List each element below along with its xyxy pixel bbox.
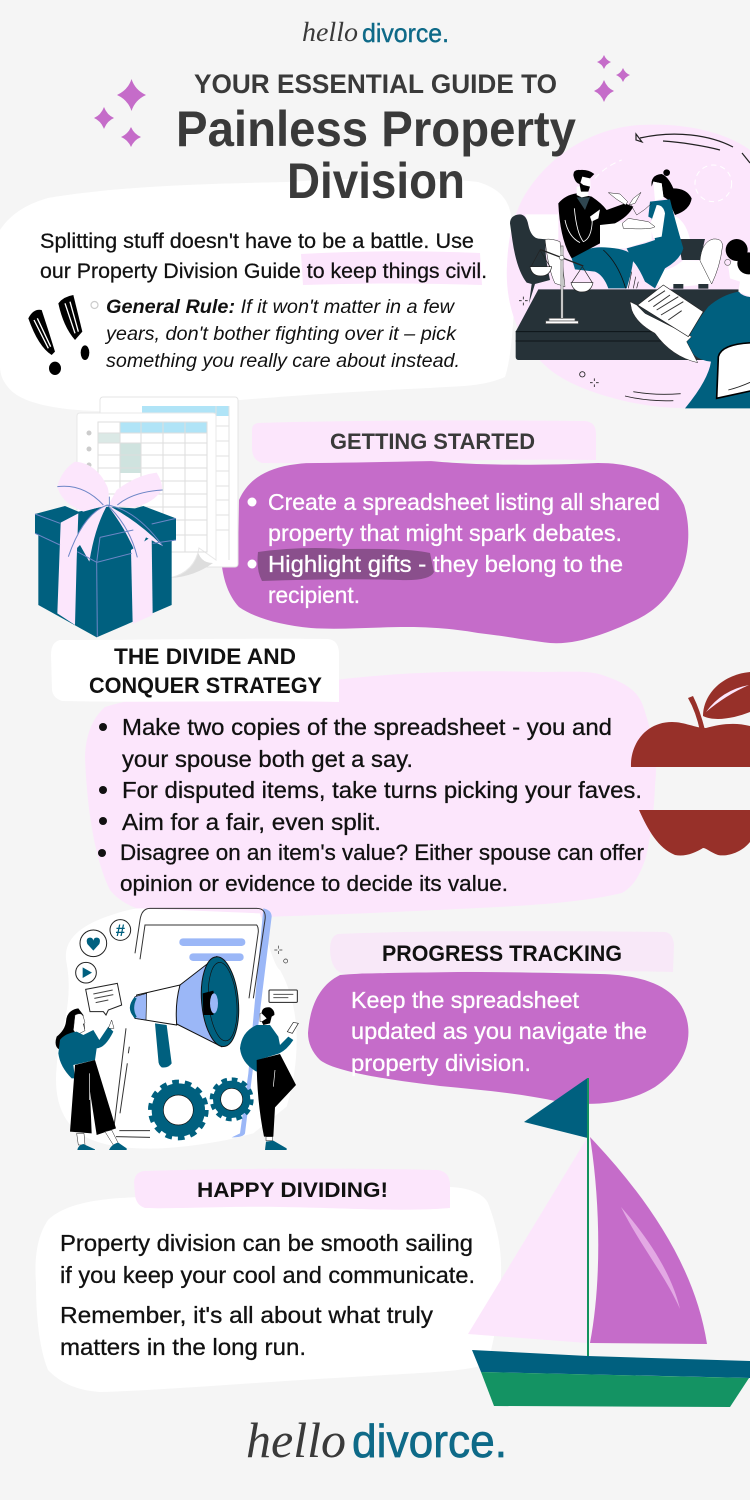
pink circle backdrop: [507, 125, 750, 408]
divide and conquer bullets: your spouse both get a say.: [122, 746, 413, 772]
getting started bullets: Highlight gifts - they belong to the: [268, 551, 623, 577]
pink sail: [468, 1138, 587, 1343]
woman: [651, 174, 692, 215]
general rule note: General Rule: If it won't matter in a few: [106, 296, 456, 318]
megaphone illustration: #: [116, 921, 125, 940]
section heading: divide and conquer: THE DIVIDE AND: [114, 644, 296, 669]
title: YOUR ESSENTIAL GUIDE TO: [194, 69, 557, 99]
bow: [57, 462, 109, 512]
leaf: [703, 672, 750, 719]
section heading: divide and conquer: CONQUER STRATEGY: [89, 673, 322, 698]
top logo: [302, 17, 449, 48]
megaphone cone: [135, 985, 180, 1025]
sparkles left: [94, 79, 146, 147]
table: [516, 289, 750, 360]
happy dividing text: if you keep your cool and communicate.: [60, 1262, 475, 1288]
phone: [232, 908, 272, 1137]
general rule note: years, don't bother fighting over it – pick: [104, 323, 457, 345]
highlight: [301, 251, 482, 285]
sofa: [525, 214, 558, 239]
divide and conquer bullets: Make two copies of the spreadsheet - you and: [122, 714, 612, 740]
hull: [472, 1350, 750, 1378]
reader with paper: [728, 257, 750, 297]
speech bubble: [86, 983, 122, 1015]
section heading: progress tracking: [330, 931, 674, 974]
divide and conquer bullets: opinion or evidence to decide its value.: [120, 871, 508, 896]
divide and conquer bullets: For disputed items, take turns picking your faves.: [122, 777, 642, 803]
getting started bullets: [248, 489, 660, 608]
bottom half: [639, 810, 750, 856]
ui bars: [179, 938, 245, 946]
progress tracking text: updated as you navigate the: [351, 1018, 647, 1044]
spreadsheet illustration: [77, 397, 238, 578]
getting started bullets: property that might spark debates.: [268, 520, 622, 546]
flag: [524, 1078, 588, 1138]
getting started bullets: recipient.: [268, 582, 360, 608]
section heading: divide and conquer: [51, 639, 339, 702]
stem: [688, 696, 705, 731]
top logo: divorce.: [362, 18, 449, 48]
curled shadow: [172, 547, 213, 578]
sparkles right: [594, 55, 630, 102]
happy dividing text: matters in the long run.: [60, 1334, 306, 1360]
mast: [587, 1078, 589, 1358]
icon: gift box: [35, 462, 176, 637]
progress tracking text: Keep the spreadsheet: [351, 987, 580, 1013]
divide and conquer bullets: [98, 714, 644, 896]
top half: [631, 722, 750, 767]
progress tracking text: [351, 987, 647, 1076]
megaphone handle: [155, 1023, 172, 1067]
panel: intro white blob: [0, 178, 515, 411]
general rule note: [91, 296, 460, 372]
scale: [530, 246, 593, 324]
title: Painless Property: [176, 101, 576, 157]
bottom logo: [246, 1412, 507, 1468]
section heading: getting started: [252, 420, 596, 463]
front sheet: [77, 413, 216, 578]
gears: [150, 1079, 252, 1138]
white backdrop: [56, 908, 297, 1149]
icon: apple: [631, 672, 750, 856]
intro text: [40, 229, 487, 285]
man: [572, 247, 633, 288]
bottom logo: hello: [246, 1412, 346, 1468]
section heading: progress tracking: PROGRESS TRACKING: [382, 941, 622, 966]
section heading: happy dividing: [134, 1169, 450, 1210]
divide and conquer bullets: Aim for a fair, even split.: [122, 809, 381, 835]
section heading: happy dividing: HAPPY DIVIDING!: [197, 1179, 388, 1202]
getting started bullets: Create a spreadsheet listing all shared: [268, 489, 660, 515]
highlight on gifts: [258, 548, 434, 581]
sailboat illustration: [468, 1078, 750, 1407]
divide and conquer bullets: Disagree on an item's value? Either spouse can offer: [120, 840, 644, 865]
happy dividing text: [60, 1230, 475, 1360]
couple illustration: [507, 125, 750, 408]
top logo: hello: [302, 17, 358, 47]
happy dividing text: Property division can be smooth sailing: [60, 1230, 473, 1256]
man: [260, 1012, 268, 1022]
panel: happy dividing blob: [36, 1187, 501, 1392]
title: [176, 69, 576, 209]
general rule note: something you really care about instead.: [106, 350, 460, 372]
decorative arrows: [636, 134, 750, 163]
panel: progress tracking blob: [308, 972, 688, 1104]
title: Division: [287, 153, 465, 209]
woman: [56, 1008, 85, 1050]
happy dividing text: Remember, it's all about what truly: [60, 1302, 434, 1328]
message card: [269, 990, 297, 1002]
social icons: [80, 930, 107, 957]
bottom logo: divorce.: [352, 1415, 507, 1467]
icon: exclamation marks: [28, 295, 89, 375]
purple sail: [590, 1137, 707, 1344]
section heading: getting started: GETTING STARTED: [330, 429, 535, 454]
panel: divide and conquer blob: [85, 671, 656, 918]
dashed circles: [595, 160, 622, 178]
sparkles and lines: [519, 297, 681, 401]
megaphone illustration: [56, 908, 298, 1150]
panel: getting started blob: [222, 460, 688, 643]
back sheet: [100, 397, 238, 567]
intro text: Splitting stuff doesn't have to be a battle. Use: [40, 229, 474, 253]
intro text: our Property Division Guide to keep things civil.: [40, 259, 487, 283]
progress tracking text: property division.: [351, 1050, 531, 1076]
